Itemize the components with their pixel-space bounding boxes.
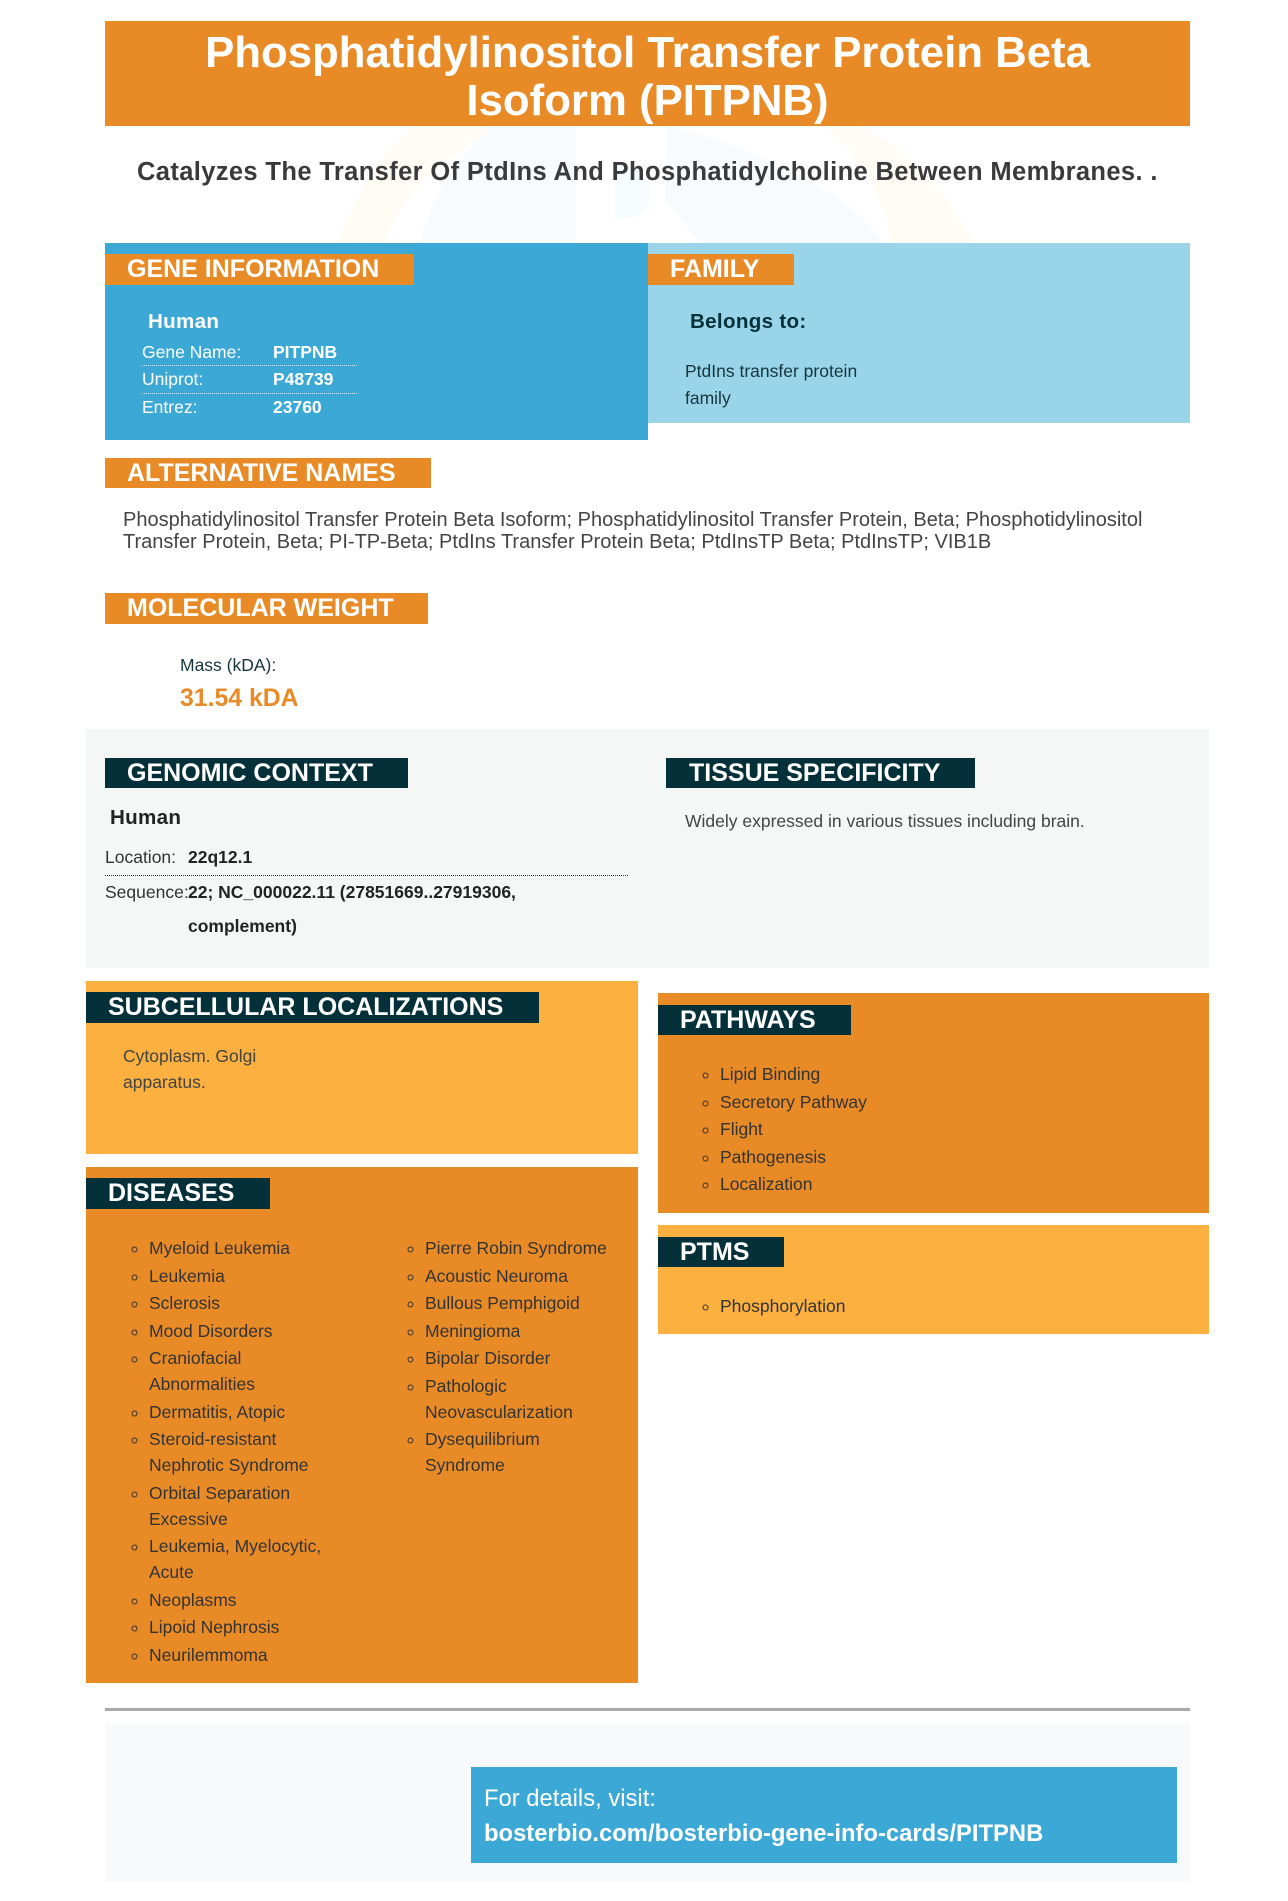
alternative names text (123, 509, 1142, 553)
details url: bosterbio.com/bosterbio-gene-info-cards/PITPNB (484, 1820, 1043, 1847)
title: Phosphatidylinositol Transfer Protein Beta (205, 28, 1090, 77)
alternative names text: Transfer Protein, Beta; PI-TP-Beta; PtdIns Transfer Protein Beta; PtdInsTP Beta; PtdInsTP; VIB1B (123, 531, 991, 553)
disease list column 2 (408, 1238, 607, 1475)
species: Human (148, 310, 219, 333)
disease list column 1: Neurilemmoma (149, 1644, 268, 1664)
divider (105, 1708, 1190, 1711)
subtitle: Catalyzes The Transfer Of PtdIns And Phosphatidylcholine Between Membranes. . (137, 158, 1158, 186)
panel: genomic context and tissue specificity: complement) (188, 916, 297, 936)
disease list column 1: Mood Disorders (149, 1320, 273, 1340)
sequence row (105, 882, 516, 936)
heading: molecular weight: MOLECULAR WEIGHT (127, 594, 394, 622)
mass value: 31.54 kDA (180, 685, 299, 712)
pathway list: Flight (720, 1119, 763, 1139)
pathway list: Localization (720, 1174, 812, 1194)
entrez row: Entrez: (142, 397, 197, 417)
disease list column 2: Meningioma (425, 1320, 520, 1340)
panel: pathways (658, 993, 1209, 1213)
disease list column 1: Steroid-resistant Nephrotic Syndrome (149, 1429, 309, 1475)
ptm list: Phosphorylation (720, 1296, 846, 1316)
disease list column 1: Lipoid Nephrosis (149, 1617, 279, 1637)
panel: subcellular localizations (86, 981, 638, 1154)
disease list column 2: Acoustic Neuroma (425, 1266, 568, 1286)
disease list column 1 (132, 1238, 321, 1664)
species: Human (110, 806, 181, 829)
location row: Location: (105, 847, 176, 867)
disease list column 1: Leukemia, Myelocytic, Acute (149, 1536, 321, 1582)
heading: gene information: GENE INFORMATION (127, 255, 379, 283)
panel: family (648, 243, 1190, 423)
dotted separator (105, 875, 628, 876)
heading: diseases (86, 1178, 270, 1209)
heading: ptms (658, 1237, 784, 1267)
disease list column 2: Dysequilibrium Syndrome (425, 1429, 540, 1475)
gene name row: Gene Name: (142, 342, 241, 362)
localization text: apparatus. (123, 1072, 206, 1092)
panel: genomic context and tissue specificity: 22; NC_000022.11 (27851669..27919306, (188, 882, 516, 902)
disease list column 1: Craniofacial Abnormalities (149, 1348, 255, 1394)
disease list column 2: Pierre Robin Syndrome (425, 1238, 607, 1258)
disease list column 1: Leukemia (149, 1266, 225, 1286)
location row (105, 847, 252, 867)
panel: genomic context and tissue specificity: 22q12.1 (188, 847, 252, 867)
uniprot row (142, 367, 357, 394)
heading: pathways (658, 1005, 851, 1035)
heading: ptms: PTMS (680, 1238, 749, 1266)
title (105, 21, 1190, 126)
heading: family: FAMILY (670, 255, 759, 283)
disease list column 1: Myeloid Leukemia (149, 1238, 290, 1258)
pathway list: Secretory Pathway (720, 1092, 867, 1112)
uniprot row: Uniprot: (142, 369, 203, 389)
callout: details link (471, 1767, 1177, 1863)
heading: genomic context: GENOMIC CONTEXT (127, 759, 373, 787)
family text (685, 361, 857, 408)
gene name row: PITPNB (273, 342, 337, 362)
title: Isoform (PITPNB) (466, 76, 829, 125)
tissue text: Widely expressed in various tissues including brain. (685, 811, 1085, 831)
family text: PtdIns transfer protein (685, 361, 857, 381)
panel: footer (105, 1723, 1190, 1882)
disease list column 2: Bullous Pemphigoid (425, 1293, 580, 1313)
disease list column 1: Neoplasms (149, 1590, 237, 1610)
heading: family (648, 254, 794, 285)
details label: For details, visit: (484, 1785, 656, 1812)
disease list column 1: Dermatitis, Atopic (149, 1402, 285, 1422)
heading: diseases: DISEASES (108, 1179, 234, 1207)
family text: family (685, 388, 731, 408)
heading: tissue specificity: TISSUE SPECIFICITY (689, 759, 940, 787)
pathway list: Pathogenesis (720, 1146, 826, 1166)
disease list column 2: Pathologic Neovascularization (425, 1376, 573, 1422)
disease list column 1: Orbital Separation Excessive (149, 1482, 290, 1528)
uniprot row: P48739 (273, 369, 333, 389)
panel: ptms (658, 1225, 1209, 1334)
sequence row: Sequence: (105, 882, 189, 902)
heading: alternative names: ALTERNATIVE NAMES (127, 459, 396, 487)
disease list column 2: Bipolar Disorder (425, 1348, 550, 1368)
heading: pathways: PATHWAYS (680, 1006, 816, 1034)
mass label: Mass (kDA): (180, 655, 276, 675)
localization text: Cytoplasm. Golgi (123, 1046, 256, 1066)
pathway list: Lipid Binding (720, 1064, 820, 1084)
panel: genomic context and tissue specificity (86, 729, 1209, 968)
pathway list (702, 1064, 867, 1194)
localization text (123, 1046, 256, 1092)
gene name row (142, 340, 357, 366)
panel: gene information (105, 243, 648, 440)
heading: subcellular localizations: SUBCELLULAR LOCALIZATIONS (108, 993, 503, 1021)
background watermark (338, 126, 972, 243)
entrez row: 23760 (273, 397, 322, 417)
disease list column 1: Sclerosis (149, 1293, 220, 1313)
alternative names text: Phosphatidylinositol Transfer Protein Beta Isoform; Phosphatidylinositol Transfer Protein, Beta; Phosphotidylinositol (123, 509, 1142, 531)
belongs to label: Belongs to: (690, 310, 807, 333)
entrez row (142, 397, 322, 417)
panel: diseases (86, 1167, 638, 1683)
